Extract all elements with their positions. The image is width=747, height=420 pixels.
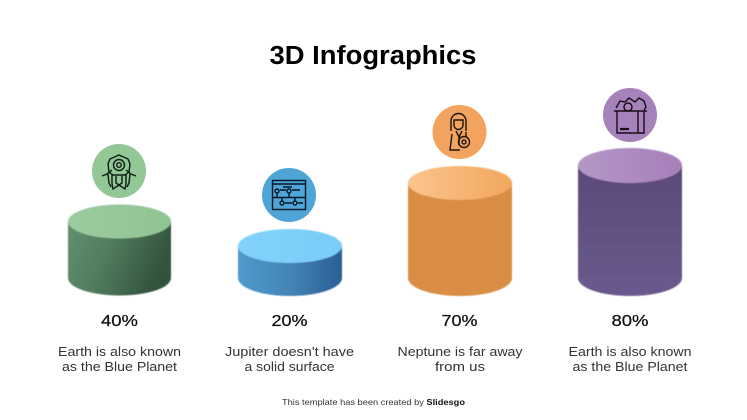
description: column 4 bbox=[568, 345, 692, 374]
description: column 2: Jupiter doesn't have bbox=[225, 345, 354, 359]
label: 20%: 20% bbox=[272, 313, 308, 330]
label: 80%: 80% bbox=[612, 313, 648, 330]
icon: purple box bbox=[603, 88, 657, 142]
description: column 1: as the Blue Planet bbox=[62, 360, 178, 374]
description: column 1 bbox=[58, 345, 181, 374]
description: column 3: Neptune is far away bbox=[398, 345, 523, 359]
description: column 3 bbox=[398, 345, 523, 374]
cylinder: blue 20% bbox=[238, 229, 342, 296]
description: column 2 bbox=[225, 345, 354, 374]
description: column 2: a solid surface bbox=[244, 360, 335, 374]
footer credit: This template has been created by Slidesgo bbox=[282, 397, 465, 407]
cylinder: green 40% bbox=[68, 204, 171, 296]
cylinder: purple 80% bbox=[578, 148, 682, 296]
description: column 4: as the Blue Planet bbox=[572, 360, 688, 374]
title: 3D Infographics bbox=[270, 42, 476, 70]
description: column 3: from us bbox=[435, 360, 485, 374]
description: column 4: Earth is also known bbox=[568, 345, 692, 359]
label: 40%: 40% bbox=[101, 313, 138, 330]
icon: orange worker bbox=[432, 105, 486, 159]
icon: green badge bbox=[92, 144, 146, 198]
icon: blue diagram bbox=[262, 168, 316, 222]
description: column 1: Earth is also known bbox=[58, 345, 181, 359]
cylinder: orange 70% bbox=[408, 166, 512, 296]
label: 70%: 70% bbox=[442, 313, 478, 330]
